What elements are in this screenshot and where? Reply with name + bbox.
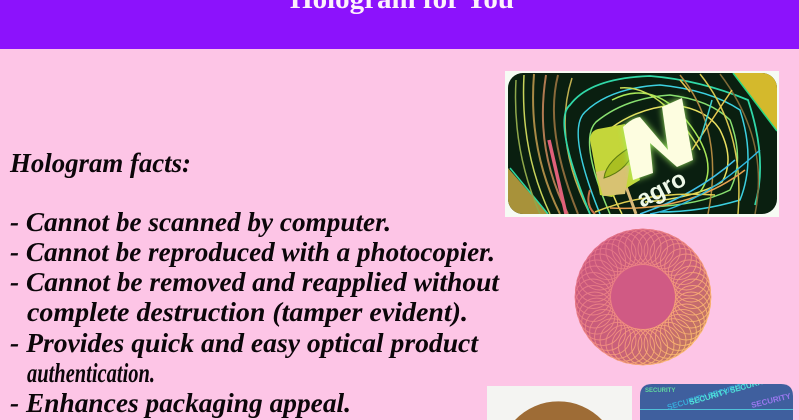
hologram image: pink guilloche disc	[575, 229, 711, 365]
security microtext: SECURITY SECURITY	[666, 380, 749, 412]
fact: authentication: authentication.	[27, 358, 155, 388]
header band	[0, 0, 799, 49]
fact: tamper evident	[10, 267, 501, 327]
rainbow line swirls	[510, 73, 777, 214]
disc centre	[611, 265, 675, 329]
gold corners	[733, 73, 777, 131]
fact: tamper evident: - Cannot be removed and reapplied without	[10, 267, 501, 297]
N letter	[623, 98, 693, 180]
fact: authentication: - Provides quick and easy optical product	[10, 328, 480, 358]
facts heading: Hologram facts:	[9, 148, 191, 178]
fact: authentication	[10, 328, 480, 388]
security microtext: SECURITY	[645, 388, 675, 394]
security microtext: SECURITY SECURITY	[688, 375, 771, 407]
fact: tamper evident: complete destruction (tamper evident).	[27, 297, 468, 327]
N letter glow	[623, 98, 693, 180]
hologram image: blue security strip	[640, 384, 793, 420]
leaf tile	[590, 124, 640, 197]
hologram image: bronze disc on white	[487, 386, 632, 420]
facts text block	[9, 148, 501, 418]
fact: scanning: - Cannot be scanned by computer.	[10, 207, 391, 237]
fact: photocopying: - Cannot be reproduced with a photocopier.	[10, 237, 495, 267]
agro label: agro	[632, 165, 691, 213]
hologram image: N agro label	[505, 71, 779, 217]
security microtext	[645, 384, 793, 410]
guilloche lattice	[575, 229, 711, 365]
fact: packaging: - Enhances packaging appeal.	[10, 388, 351, 418]
